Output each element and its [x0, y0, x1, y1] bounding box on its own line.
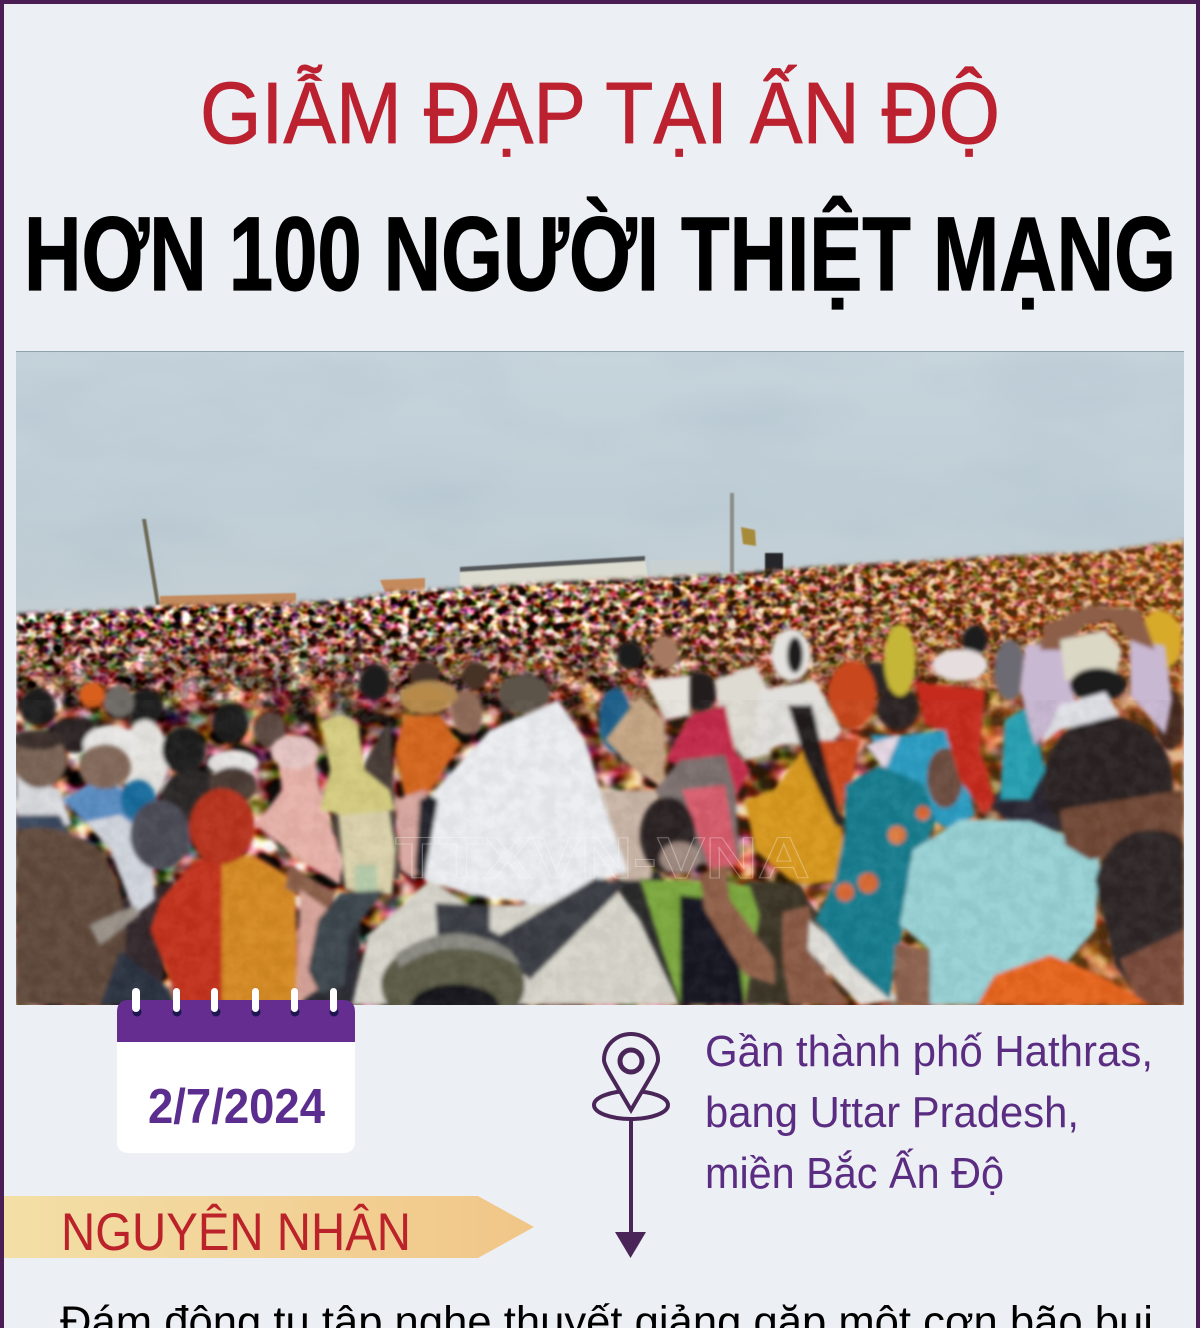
location text	[705, 1027, 1153, 1198]
man in white shirt at far left	[16, 770, 72, 835]
bare arm with bracelet	[782, 905, 850, 1005]
photo foreground people, right side	[605, 605, 1184, 1005]
woman with green top and black dress	[640, 880, 760, 1005]
bald man with blue shawl	[62, 785, 155, 915]
heading banner: causes	[4, 1196, 534, 1262]
woman with pink-red saree and grey scarf	[665, 705, 750, 800]
woman in teal scarf	[815, 765, 935, 1000]
heading banner: causes: NGUYÊN NHÂN	[61, 1203, 411, 1262]
calendar body	[117, 1042, 355, 1153]
woman in orange shawl	[395, 715, 460, 800]
woman in yellow-orange saree	[745, 745, 845, 885]
photo crowd texture	[16, 530, 1184, 1010]
calendar date: 2/7/2024	[148, 1080, 325, 1134]
location text: Gần thành phố Hathras,	[705, 1027, 1153, 1076]
head of man, dark hair	[1041, 714, 1176, 824]
photo: crowd gathered on open ground	[13, 350, 1184, 1032]
photo foreground people, left side	[13, 686, 680, 1032]
photo soft watermark: TTXVN-VNA	[395, 826, 810, 891]
teal and lavender behind man	[1000, 705, 1045, 800]
foreground man with brown hair	[16, 828, 126, 1005]
child in cream dress	[338, 805, 396, 895]
icon: location pin with downward arrow	[594, 1034, 668, 1258]
photo sky	[16, 350, 1184, 621]
photo foreground shadows between people	[100, 720, 1070, 1005]
dark patterned jacket	[308, 890, 385, 995]
foreground man and orange shirt	[1095, 830, 1184, 1005]
woman in yellow headscarf	[320, 715, 395, 815]
photo background structures: poles, tank and orange bar	[142, 493, 783, 610]
location text: bang Uttar Pradesh,	[705, 1088, 1079, 1137]
calendar rings	[132, 988, 338, 1016]
man in cyan t-shirt	[900, 820, 1100, 1005]
location text: miền Bắc Ấn Độ	[705, 1148, 1004, 1198]
red cloth	[915, 682, 995, 815]
photo grain overlay	[16, 700, 1184, 1005]
calendar: date card	[117, 988, 355, 1153]
white clothed men	[715, 665, 775, 760]
title: red headline: GIẪM ĐẠP TẠI ẤN ĐỘ	[200, 64, 1000, 162]
woman in red headscarf and orange saree	[150, 855, 300, 1005]
woman in blue scarf	[870, 730, 975, 830]
photo mid-ground people	[20, 610, 1184, 830]
calendar purple header	[117, 1000, 355, 1042]
woman in pink veil	[255, 740, 342, 885]
person with white shroud and checked shirt	[352, 880, 680, 1005]
